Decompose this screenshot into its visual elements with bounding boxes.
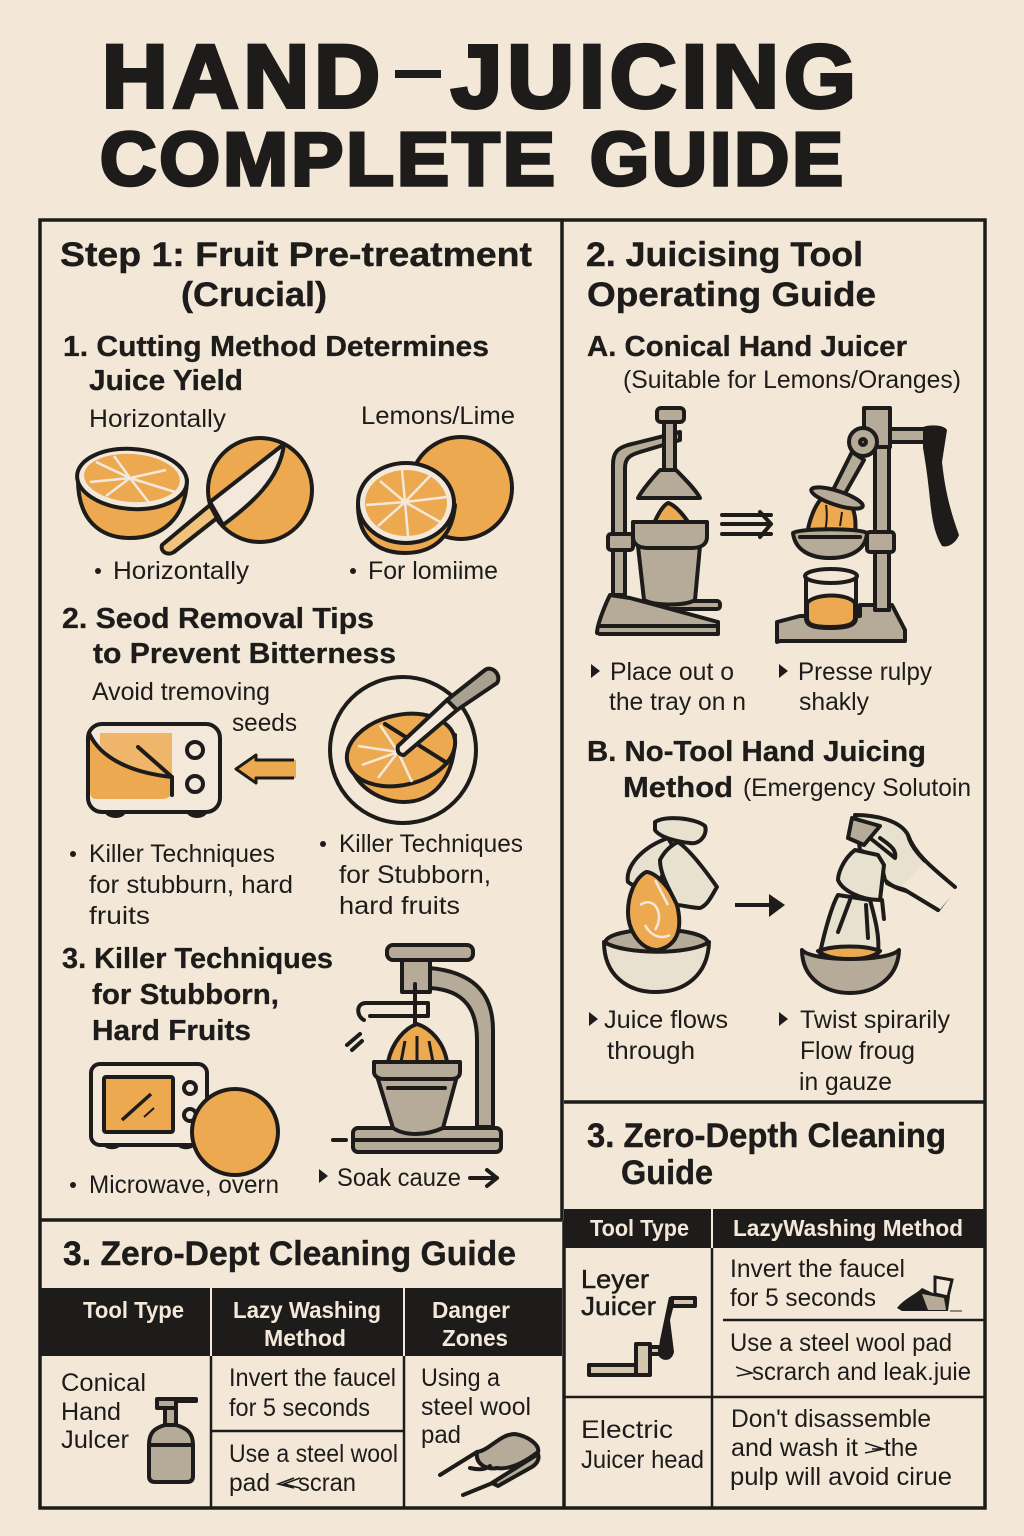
heading: no-tool method: B. No-Tool Hand Juicing <box>587 736 926 768</box>
caption: twist <box>779 1006 950 1096</box>
caption: twist: Flow froug <box>800 1037 915 1065</box>
caption: soak gauze: Soak cauze <box>337 1164 461 1192</box>
panel: cleaning guide left <box>40 1235 562 1508</box>
heading: conical hand juicer: (Suitable for Lemons/Oranges) <box>623 366 961 394</box>
cell: conical hand juicer <box>61 1369 146 1454</box>
icon: conical juicer pressed <box>777 408 959 642</box>
cell: do not disassemble: pulp will avoid cirue <box>730 1463 952 1491</box>
heading: cutting method: Juice Yield <box>89 365 243 397</box>
caption: place out: the tray on n <box>609 688 746 716</box>
cell: steel wool <box>730 1329 971 1386</box>
caption: juice flows: Juice flows <box>604 1006 728 1034</box>
title: COMPLETE <box>100 117 558 201</box>
heading: zero-depth cleaning: Guide <box>621 1154 713 1192</box>
heading: conical hand juicer <box>587 331 961 394</box>
title: GUIDE <box>590 117 846 201</box>
icon: microwave and orange <box>91 1064 278 1175</box>
heading: no-tool method: Method <box>623 772 733 804</box>
caption: press pulpy: Presse rulpy <box>798 658 932 686</box>
caption: microwave oven: Microwave, overn <box>89 1171 279 1199</box>
caption: killer techniques right: hard fruits <box>339 892 460 920</box>
caption: killer techniques left: for stubburn, hard <box>89 871 293 899</box>
arrow: right <box>735 894 785 917</box>
caption: horizontally: Horizontally <box>113 557 250 585</box>
table header: Tool Type <box>83 1297 184 1323</box>
caption: killer techniques left <box>70 840 293 930</box>
caption: killer techniques right: Killer Techniques <box>339 830 523 858</box>
heading: zero-depth cleaning: 3. Zero-Depth Cleaning <box>587 1117 946 1155</box>
table header: LazyWashing Method <box>733 1215 963 1241</box>
heading: killer techniques <box>62 943 333 1047</box>
table header: Zones <box>442 1325 508 1351</box>
cell: steel wool <box>229 1440 398 1497</box>
caption: twist: Twist spirarily <box>800 1006 950 1034</box>
icon: halved lemon with whole fruit <box>358 437 512 553</box>
cell: steel wool: Use a steel wool pad <box>730 1329 952 1357</box>
icon: microwave with fruit <box>88 724 220 818</box>
label: avoid removing seeds <box>92 678 297 737</box>
heading: killer techniques: for Stubborn, <box>92 979 279 1011</box>
heading: zero-depth cleaning <box>587 1117 946 1192</box>
cell: lever juicer: Leyer <box>581 1264 649 1294</box>
caption: for lemons: For lomiime <box>368 557 498 585</box>
cell: danger zones: pad <box>421 1421 461 1449</box>
heading: cutting method <box>63 331 489 397</box>
heading: seed removal: to Prevent Bitterness <box>93 638 396 670</box>
icon: hand with steel wool pad <box>440 1434 539 1495</box>
cell: lever juicer <box>581 1264 656 1321</box>
label: avoid removing seeds: seeds <box>232 709 297 737</box>
label: lemons lime: Lemons/Lime <box>361 402 515 430</box>
cell: electric juicer head: Electric <box>581 1416 673 1444</box>
arrow: double right <box>722 512 771 537</box>
table header: Danger <box>432 1297 510 1323</box>
label: avoid removing seeds: Avoid tremoving <box>92 678 270 706</box>
cell: conical hand juicer: Conical <box>61 1369 146 1397</box>
cell: do not disassemble: Don't disassemble <box>731 1405 931 1433</box>
caption: killer techniques left: fruits <box>89 902 150 930</box>
cell: invert faucet: for 5 seconds <box>730 1284 876 1312</box>
cell: do not disassemble <box>730 1405 952 1491</box>
cell: invert faucet: Invert the faucel <box>229 1364 396 1392</box>
cell: danger zones: Using a <box>421 1364 500 1392</box>
heading: seed removal <box>62 603 396 670</box>
caption: place out <box>591 658 746 716</box>
heading: seed removal: 2. Seod Removal Tips <box>62 603 374 635</box>
icon: faucet scrub <box>897 1277 962 1311</box>
cell: conical hand juicer: Hand <box>61 1398 121 1426</box>
panel: juicing tool operating guide <box>586 236 971 1096</box>
caption: press pulpy <box>779 658 932 716</box>
icon: pump bottle <box>149 1399 196 1482</box>
caption: twist: in gauze <box>799 1068 892 1096</box>
heading: step 1: (Crucial) <box>181 276 327 314</box>
heading: no-tool method <box>587 736 971 804</box>
heading: cutting method: 1. Cutting Method Determines <box>63 331 489 363</box>
cell: invert faucet: Invert the faucel <box>730 1255 905 1283</box>
cell: electric juicer head <box>581 1416 704 1474</box>
caption: place out: Place out o <box>610 658 734 686</box>
cell: invert faucet <box>229 1364 396 1422</box>
cell: steel wool: pad <box>229 1469 270 1497</box>
caption: juice flows <box>589 1006 728 1065</box>
caption: killer techniques right: for Stubborn, <box>339 861 491 889</box>
icon: hand twisting gauze over bowl <box>802 815 960 993</box>
heading: killer techniques: 3. Killer Techniques <box>62 943 333 975</box>
cell: steel wool: scran <box>298 1469 356 1497</box>
cell: electric juicer head: Juicer head <box>581 1446 704 1474</box>
caption: killer techniques left: Killer Techniques <box>89 840 275 868</box>
caption: killer techniques right <box>320 830 523 920</box>
panel: step 1 fruit pre-treatment <box>60 236 532 1199</box>
arrow: left <box>236 755 296 783</box>
cell: do not disassemble: the <box>884 1434 918 1462</box>
table header: Tool Type <box>590 1215 689 1241</box>
icon: fruit in gauze over bowl <box>604 818 717 992</box>
cell: lever juicer: Juicer <box>581 1291 656 1321</box>
label: horizontally: Horizontally <box>89 405 227 433</box>
icon: conical juicer open <box>597 408 720 634</box>
heading: juicing tool: Operating Guide <box>587 276 876 314</box>
heading: killer techniques: Hard Fruits <box>92 1015 251 1047</box>
cell: danger zones: steel wool <box>421 1393 531 1421</box>
title <box>100 26 861 201</box>
cell: invert faucet <box>730 1255 905 1312</box>
icon: orange in bowl with knife <box>330 669 498 823</box>
cell: steel wool: Use a steel wool <box>229 1440 398 1468</box>
heading: step 1: Step 1: Fruit Pre-treatment <box>60 236 532 274</box>
title: HAND <box>102 26 385 126</box>
heading: juicing tool <box>586 236 876 314</box>
table header <box>564 1209 985 1248</box>
heading: conical hand juicer: A. Conical Hand Juicer <box>587 331 907 363</box>
cell: steel wool: scrarch and leak.juie <box>752 1358 971 1386</box>
cell: do not disassemble: and wash it <box>731 1434 858 1462</box>
heading: step 1 <box>60 236 532 314</box>
table header: Method <box>264 1325 346 1351</box>
panel: layout frame <box>40 220 985 1508</box>
heading: zero-dept cleaning: 3. Zero-Dept Cleaning Guide <box>63 1235 516 1273</box>
icon: stand press with orange <box>333 945 501 1152</box>
title: JUICING <box>451 26 861 126</box>
panel: cleaning guide right <box>564 1117 985 1508</box>
cell: danger zones <box>421 1364 531 1449</box>
heading: juicing tool: 2. Juicising Tool <box>586 236 863 274</box>
heading: no-tool method: (Emergency Solutoin <box>743 774 971 802</box>
cell: conical hand juicer: Julcer <box>61 1426 129 1454</box>
table header <box>40 1288 562 1356</box>
table header: Lazy Washing <box>233 1297 381 1323</box>
caption: juice flows: through <box>607 1037 695 1065</box>
caption: press pulpy: shakly <box>799 688 869 716</box>
icon: halved orange and knife <box>75 438 312 554</box>
cell: invert faucet: for 5 seconds <box>229 1394 370 1422</box>
icon: lever juicer <box>589 1297 695 1375</box>
